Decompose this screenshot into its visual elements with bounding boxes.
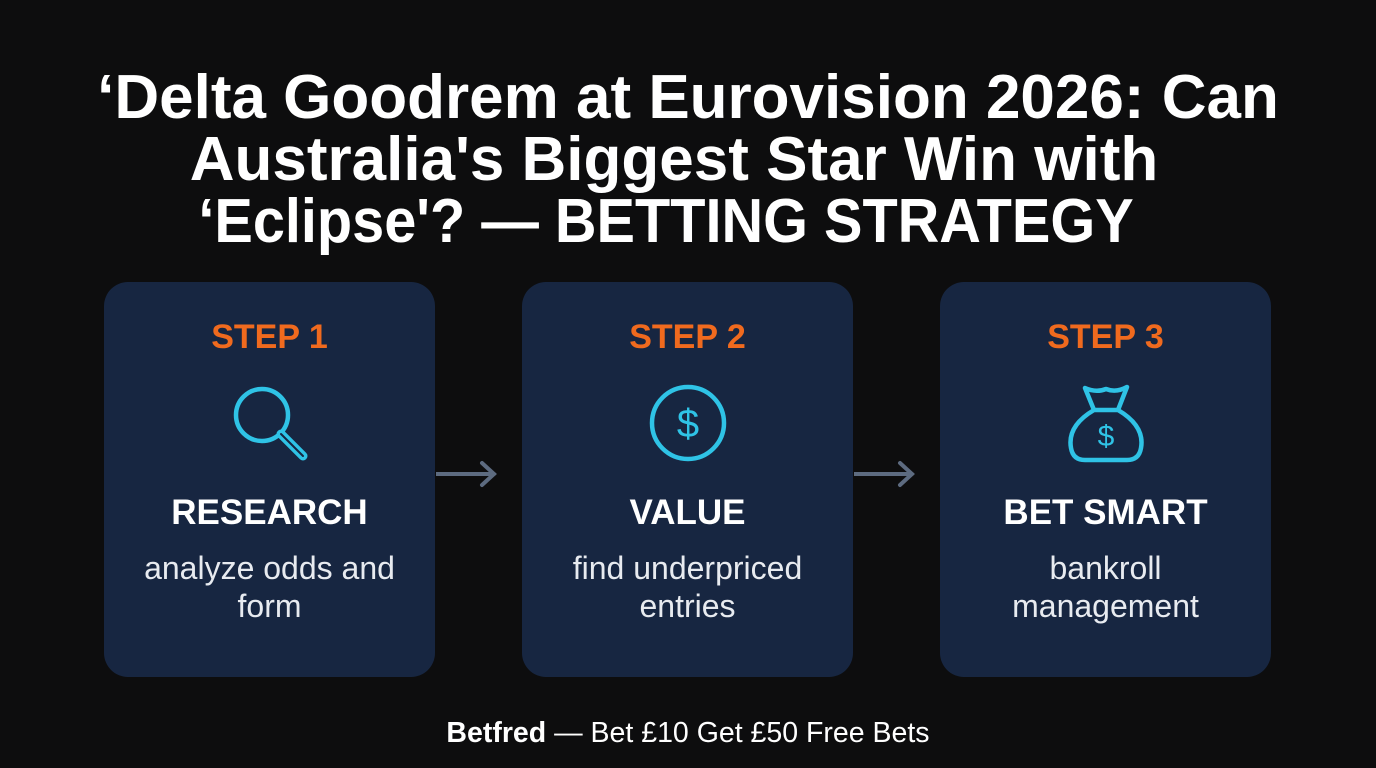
step label 3: STEP 3	[1047, 318, 1164, 356]
icon: magnifier	[234, 386, 308, 460]
title: ‘Eclipse'? — BETTING STRATEGY	[198, 187, 1134, 256]
heading: value: VALUE	[629, 493, 746, 532]
footer: Betfred — Bet £10 Get £50 Free Bets	[446, 717, 930, 749]
icon: money bag	[1068, 384, 1144, 462]
text: value	[573, 550, 802, 624]
text: research	[144, 550, 395, 624]
text: bet smart: bankroll	[1049, 550, 1162, 586]
panel: step 1	[104, 282, 435, 677]
title: ‘Delta Goodrem at Eurovision 2026: Can	[97, 63, 1279, 132]
text: value: find underpriced	[573, 550, 802, 586]
icon: dollar coin: $	[677, 402, 699, 446]
icon: money bag: $	[1098, 420, 1115, 453]
panel: step 2	[522, 282, 853, 677]
text: research: form	[238, 588, 302, 624]
step label 2: STEP 2	[629, 318, 746, 356]
arrow 2	[854, 460, 915, 488]
text: value: entries	[639, 588, 736, 624]
title	[97, 63, 1279, 256]
panel: step 3	[940, 282, 1271, 677]
text: bet smart: management	[1012, 588, 1199, 624]
text: bet smart	[1012, 550, 1199, 624]
title: Australia's Biggest Star Win with	[190, 125, 1158, 194]
heading: bet smart: BET SMART	[1003, 493, 1208, 532]
step label 1: STEP 1	[211, 318, 328, 356]
text: research: analyze odds and	[144, 550, 395, 586]
heading: research: RESEARCH	[171, 493, 368, 532]
icon: dollar coin	[650, 384, 726, 462]
arrow 1	[436, 460, 497, 488]
